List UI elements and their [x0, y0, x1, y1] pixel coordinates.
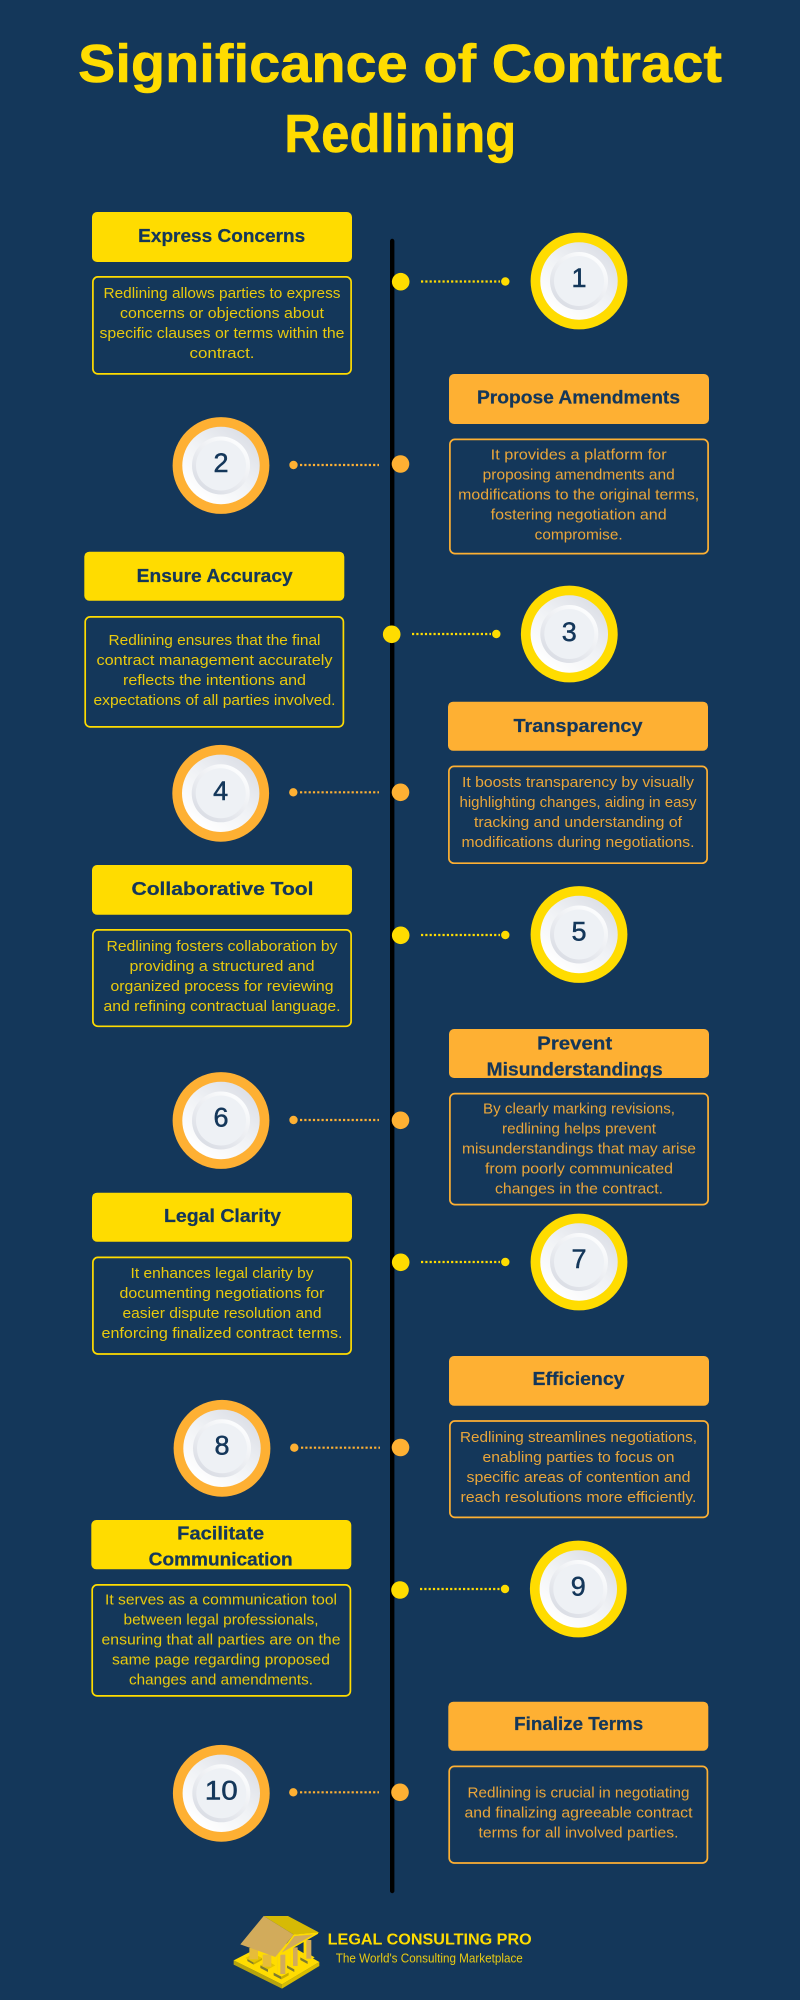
- description box: reflects the intentions and: [123, 673, 306, 689]
- number badge 7: 7: [571, 1244, 587, 1274]
- connector: [392, 1254, 509, 1271]
- description box: reach resolutions more efficiently.: [460, 1490, 696, 1506]
- description box: between legal professionals,: [124, 1612, 318, 1628]
- number badge 9: 9: [571, 1572, 586, 1602]
- description box: [93, 1257, 351, 1354]
- description box: Redlining is crucial in negotiating: [468, 1786, 690, 1802]
- description box: proposing amendments and: [483, 468, 675, 484]
- description box: By clearly marking revisions,: [483, 1102, 675, 1118]
- description box: highlighting changes, aiding in easy: [460, 795, 697, 811]
- item 7: Legal Clarity: [92, 1193, 627, 1354]
- description box: [450, 439, 708, 554]
- description box: concerns or objections about: [120, 306, 324, 322]
- number badge 10: 10: [205, 1776, 238, 1806]
- heading box: Efficiency: Efficiency: [532, 1369, 624, 1389]
- description box: [93, 930, 351, 1026]
- description box: easier dispute resolution and: [122, 1306, 322, 1322]
- item 10: Finalize Terms: [173, 1702, 708, 1863]
- connector: [392, 273, 509, 291]
- heading box: Propose Amendments: Propose Amendments: [477, 388, 680, 408]
- connector: [290, 1439, 409, 1456]
- heading box: Finalize Terms: Finalize Terms: [514, 1714, 643, 1734]
- description box: contract management accurately: [96, 653, 333, 669]
- item 2: Propose Amendments: [173, 374, 709, 554]
- icon: courthouse building: [234, 1916, 319, 1989]
- heading box: Legal Clarity: [92, 1193, 352, 1242]
- title: Redlining: [284, 104, 516, 164]
- description box: modifications during negotiations.: [462, 835, 694, 851]
- description box: [85, 617, 343, 727]
- number badge 1: 1: [571, 263, 587, 293]
- number badge 2: 2: [213, 448, 229, 478]
- description box: fostering negotiation and: [491, 508, 667, 524]
- heading box: Facilitate Communication: Facilitate: [177, 1524, 264, 1544]
- footer logo: [234, 1916, 532, 1989]
- item 6: Prevent Misunderstandings: [173, 1029, 709, 1205]
- description box: [449, 766, 707, 863]
- description box: from poorly communicated: [485, 1162, 673, 1178]
- description box: Redlining streamlines negotiations,: [460, 1430, 697, 1446]
- description box: providing a structured and: [130, 959, 314, 975]
- heading box: Legal Clarity: Legal Clarity: [164, 1206, 281, 1226]
- description box: It boosts transparency by visually: [462, 775, 695, 791]
- description box: documenting negotiations for: [120, 1286, 325, 1302]
- description box: terms for all involved parties.: [478, 1826, 678, 1842]
- description box: It enhances legal clarity by: [130, 1266, 314, 1282]
- number badge 6: [173, 1072, 269, 1169]
- description box: and refining contractual language.: [104, 999, 340, 1015]
- description box: [450, 1094, 708, 1205]
- description box: redlining helps prevent: [502, 1122, 656, 1138]
- description box: [449, 1766, 707, 1863]
- item 3: Ensure Accuracy: [84, 552, 618, 727]
- connector: [289, 1784, 409, 1801]
- number badge 6: 6: [213, 1102, 229, 1132]
- item 5: Collaborative Tool: [92, 865, 627, 1026]
- description box: compromise.: [535, 528, 623, 544]
- number badge 4: [172, 745, 269, 842]
- description box: Redlining fosters collaboration by: [106, 939, 338, 955]
- heading box: Collaborative Tool: [92, 865, 352, 915]
- description box: specific areas of contention and: [466, 1470, 690, 1486]
- description box: contract.: [190, 346, 254, 362]
- description box: [92, 1585, 350, 1696]
- description box: and finalizing agreeable contract: [464, 1806, 692, 1822]
- heading box: Transparency: Transparency: [514, 716, 642, 736]
- timeline vertical line: [390, 241, 394, 1891]
- item 1: Express Concerns: [92, 212, 627, 374]
- number badge 5: [531, 886, 627, 983]
- description box: Redlining ensures that the final: [108, 633, 320, 649]
- number badge 1: [531, 233, 627, 329]
- heading box: Efficiency: [449, 1356, 709, 1406]
- connector: [391, 1581, 509, 1599]
- heading box: Collaborative Tool: Collaborative Tool: [132, 879, 314, 899]
- number badge 4: 4: [213, 776, 228, 806]
- heading box: Facilitate Communication: [91, 1520, 351, 1570]
- description box: specific clauses or terms within the: [100, 326, 344, 342]
- description box: It provides a platform for: [491, 448, 667, 464]
- item 8: Efficiency: [174, 1356, 709, 1517]
- description box: changes in the contract.: [495, 1182, 663, 1198]
- description box: [450, 1421, 708, 1517]
- heading box: Prevent Misunderstandings: Misunderstandings: [487, 1060, 663, 1080]
- heading box: Ensure Accuracy: Ensure Accuracy: [137, 566, 293, 586]
- description box: It serves as a communication tool: [105, 1592, 337, 1608]
- number badge 5: 5: [571, 916, 587, 946]
- title: [78, 34, 722, 164]
- description box: organized process for reviewing: [110, 979, 334, 995]
- description box: Redlining allows parties to express: [104, 286, 340, 302]
- number badge 9: [530, 1541, 627, 1637]
- description box: expectations of all parties involved.: [94, 693, 336, 709]
- description box: misunderstandings that may arise: [462, 1142, 696, 1158]
- item 9: Facilitate Communication: [91, 1520, 627, 1696]
- heading box: Finalize Terms: [448, 1702, 708, 1751]
- description box: tracking and understanding of: [474, 815, 683, 831]
- connector: [392, 926, 509, 944]
- number badge 3: 3: [562, 617, 577, 647]
- heading box: Express Concerns: Express Concerns: [138, 226, 305, 246]
- connector: [289, 455, 409, 473]
- description box: changes and amendments.: [129, 1672, 313, 1688]
- title: Significance of Contract: [78, 34, 722, 94]
- description box: enforcing finalized contract terms.: [102, 1326, 342, 1342]
- description box: modifications to the original terms,: [458, 488, 699, 504]
- description box: same page regarding proposed: [112, 1652, 330, 1668]
- brand name: LEGAL CONSULTING PRO: [328, 1932, 532, 1948]
- heading box: Express Concerns: [92, 212, 352, 262]
- number badge 8: 8: [214, 1430, 230, 1460]
- number badge 2: [173, 417, 269, 514]
- heading box: Facilitate Communication: Communication: [149, 1550, 293, 1570]
- description box: [93, 277, 351, 374]
- description box: enabling parties to focus on: [482, 1450, 674, 1466]
- tagline: The World's Consulting Marketplace: [336, 1951, 523, 1965]
- number badge 10: [173, 1745, 270, 1842]
- heading box: Prevent Misunderstandings: Prevent: [537, 1034, 612, 1054]
- heading box: Transparency: [448, 702, 708, 751]
- connector: [289, 1112, 409, 1129]
- item 4: Transparency: [172, 702, 708, 863]
- number badge 8: [174, 1400, 270, 1497]
- heading box: Prevent Misunderstandings: [449, 1029, 709, 1080]
- number badge 3: [521, 586, 618, 682]
- heading box: Propose Amendments: [449, 374, 709, 424]
- connector: [383, 626, 500, 643]
- heading box: Ensure Accuracy: [84, 552, 344, 601]
- description box: ensuring that all parties are on the: [102, 1632, 340, 1648]
- number badge 7: [531, 1214, 627, 1310]
- connector: [289, 784, 409, 801]
